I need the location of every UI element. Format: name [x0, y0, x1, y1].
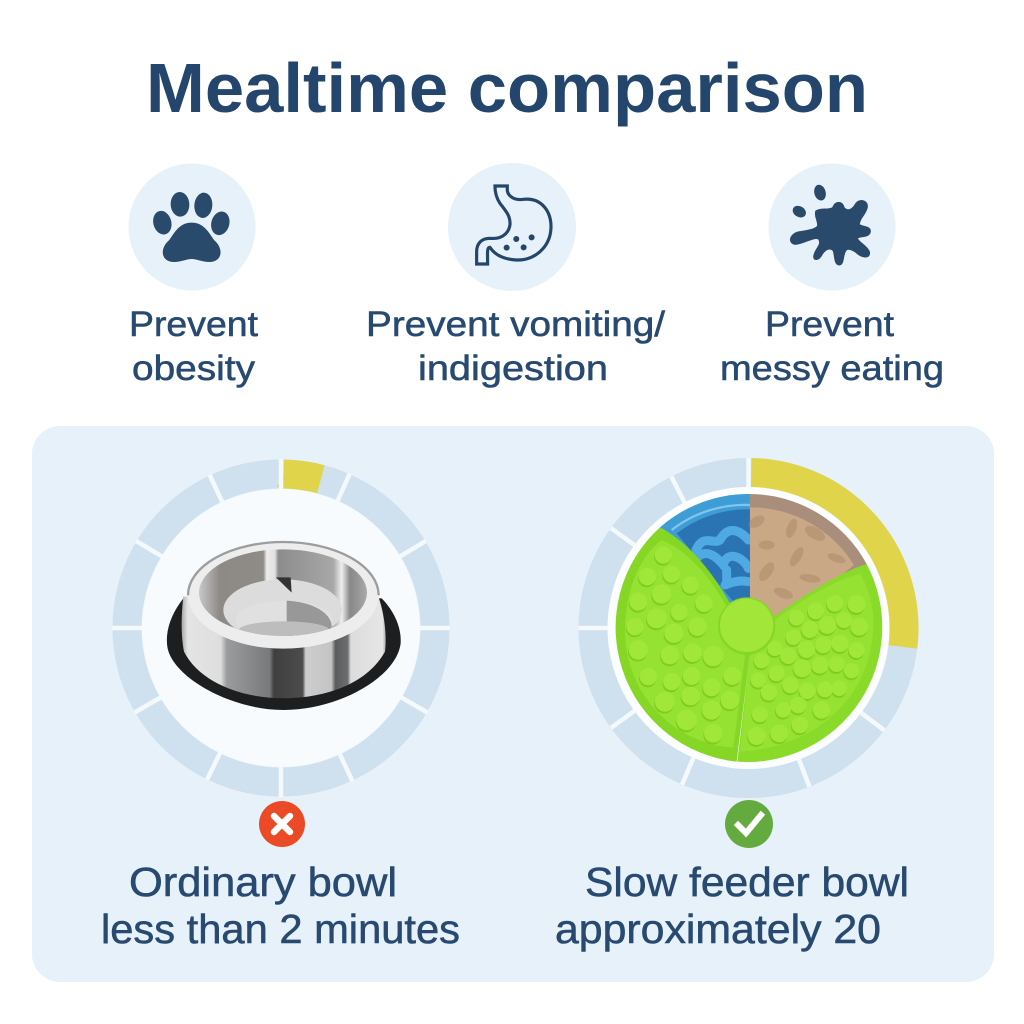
label: prevent vomiting/indigestion: indigestion: [418, 349, 608, 388]
label: prevent obesity: obesity: [132, 349, 256, 388]
column: ordinary bowl: [101, 459, 460, 952]
status icon: check: [725, 800, 773, 848]
label: prevent messy eating: messy eating: [720, 349, 944, 388]
label: ordinary bowl time: less than 2 minutes: [101, 906, 460, 952]
benefit: prevent obesity: [128, 164, 258, 388]
panel: bowl comparison: [32, 426, 994, 982]
icon: stomach: [448, 163, 576, 291]
status icon: cross: [259, 801, 305, 847]
label: prevent obesity: [129, 305, 258, 388]
benefit: prevent messy eating: [720, 164, 944, 388]
label: slow feeder time: Slow feeder bowl: [585, 859, 909, 905]
label: ordinary bowl time: Ordinary bowl: [129, 859, 397, 905]
label: prevent obesity: Prevent: [129, 305, 258, 344]
label: prevent vomiting/indigestion: [366, 305, 665, 388]
label: slow feeder time: [555, 859, 909, 952]
label: prevent messy eating: [720, 305, 944, 388]
photo: stainless steel bowl: [167, 542, 401, 710]
label: slow feeder time: approximately 20: [555, 906, 881, 952]
benefit: prevent vomiting and indigestion: [366, 163, 665, 388]
label: prevent messy eating: Prevent: [765, 305, 894, 344]
icon: paw print: [128, 164, 256, 290]
column: slow feeder bowl: [555, 458, 909, 952]
label: prevent vomiting/indigestion: Prevent vomiting/: [366, 305, 665, 344]
title: Mealtime comparison: [146, 49, 868, 127]
photo: slow feeder mat: [616, 494, 882, 762]
gauge: ordinary bowl time ring: [112, 459, 450, 797]
label: ordinary bowl time: [101, 859, 460, 952]
icon: splat: [768, 164, 896, 290]
gauge: slow feeder time ring: [578, 458, 906, 787]
